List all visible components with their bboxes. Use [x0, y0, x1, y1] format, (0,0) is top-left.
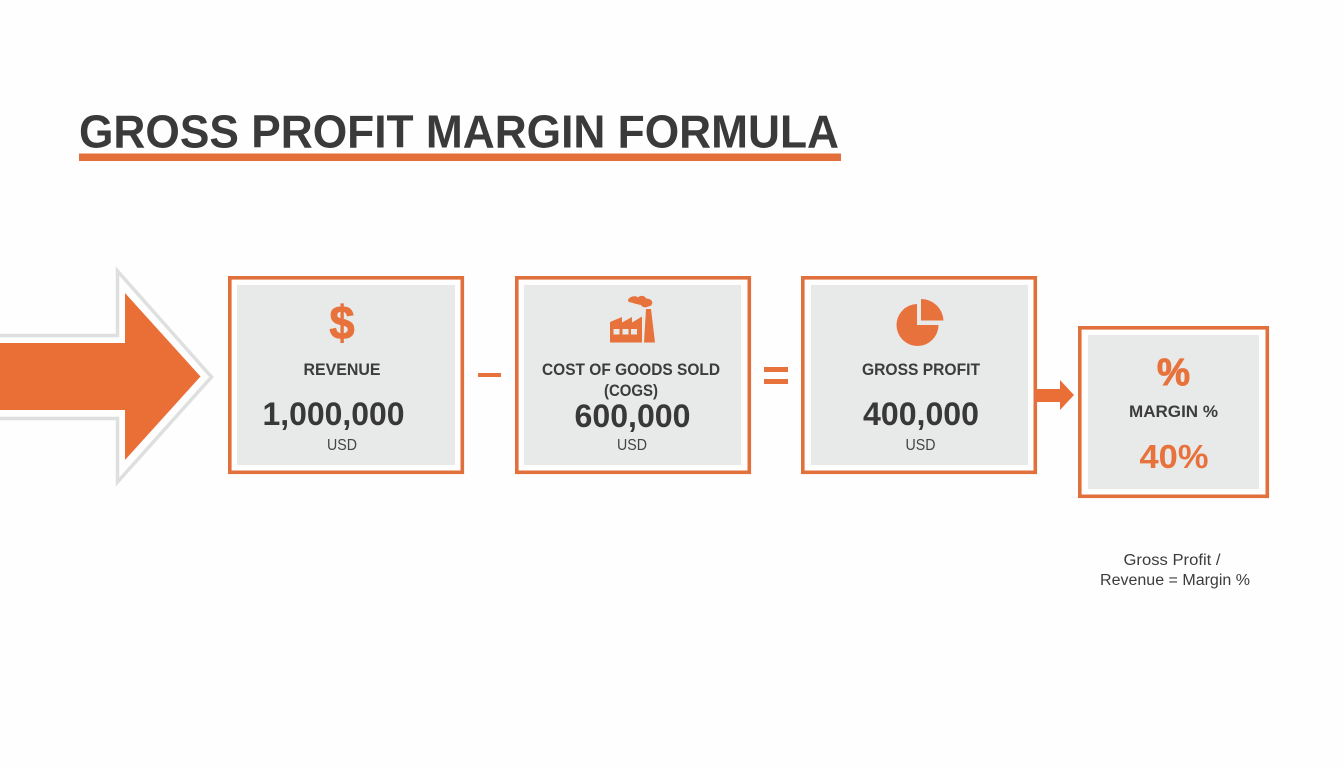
title underline — [79, 154, 841, 161]
panel: revenue — [230, 278, 462, 472]
icon: factory — [610, 296, 655, 342]
icon: dollar sign: $ — [330, 296, 354, 349]
gross profit label: GROSS PROFIT — [862, 361, 980, 379]
margin label: MARGIN % — [1129, 403, 1218, 421]
cogs value: 600,000 — [574, 398, 690, 434]
cogs label: COST OF GOODS SOLD — [542, 361, 720, 379]
large input arrow — [0, 271, 212, 482]
icon: percent sign: % — [1157, 352, 1190, 394]
gross profit value: 400,000 — [863, 396, 979, 432]
panel: cost of goods sold: (COGS) — [604, 382, 658, 400]
title: GROSS PROFIT MARGIN FORMULA — [79, 106, 839, 158]
margin value: 40% — [1140, 438, 1208, 475]
equals operator — [764, 367, 788, 384]
revenue unit: USD — [327, 437, 357, 454]
revenue value: 1,000,000 — [262, 396, 404, 432]
small connecting arrow — [1037, 380, 1074, 410]
formula note: Revenue = Margin % — [1100, 572, 1250, 589]
cogs unit: USD — [617, 437, 647, 454]
panel: margin percent — [1080, 328, 1267, 496]
formula note: Gross Profit / — [1124, 552, 1221, 569]
formula note — [1100, 552, 1250, 589]
icon: pie chart — [896, 299, 944, 346]
gross profit unit: USD — [906, 437, 936, 454]
panel: gross profit — [803, 278, 1035, 472]
panel: cost of goods sold — [517, 278, 749, 472]
revenue label: REVENUE — [304, 361, 380, 379]
minus operator — [478, 373, 501, 377]
